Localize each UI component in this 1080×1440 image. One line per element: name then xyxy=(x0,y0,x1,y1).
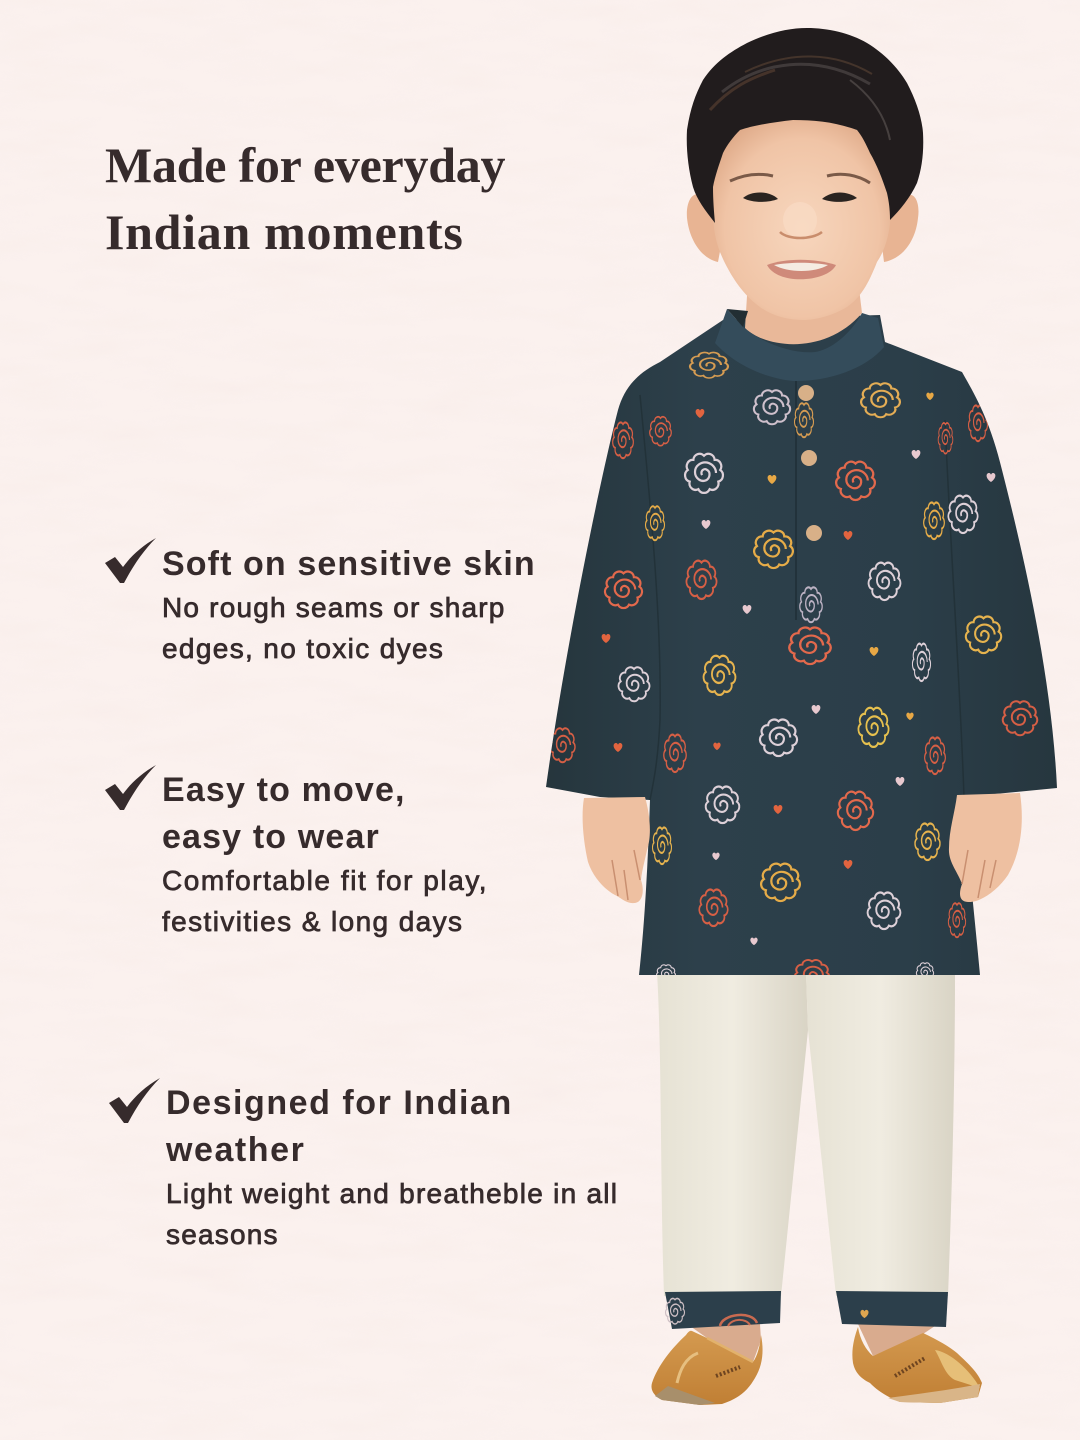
hair xyxy=(687,28,923,223)
cuffs xyxy=(665,1291,781,1329)
face xyxy=(713,115,891,320)
heading: weather xyxy=(166,1131,305,1169)
eyebrows xyxy=(730,174,773,181)
left hand xyxy=(583,797,650,903)
icon: check mark xyxy=(105,765,156,810)
description xyxy=(162,592,506,664)
hands xyxy=(583,793,1022,903)
child wearing kurta and pants xyxy=(546,28,1057,1405)
pants xyxy=(657,972,955,1362)
buttons xyxy=(798,385,814,401)
ears xyxy=(687,190,724,262)
right shoe xyxy=(852,1327,982,1403)
right hand xyxy=(949,793,1022,902)
icon: check mark xyxy=(105,538,156,583)
icon: check mark xyxy=(109,1078,160,1123)
heading: easy to wear xyxy=(162,818,380,856)
heading: Soft on sensitive skin xyxy=(162,545,536,583)
nose xyxy=(783,202,817,238)
description xyxy=(162,865,488,938)
kurta body and sleeves xyxy=(540,280,1065,991)
title: Made for everyday xyxy=(105,137,505,193)
benefit: designed for Indian weather xyxy=(109,1078,618,1250)
print: spirals xyxy=(550,352,1037,991)
placket xyxy=(795,378,797,620)
eyes xyxy=(743,192,778,202)
heading: Easy to move, xyxy=(162,771,406,809)
description: seasons xyxy=(166,1219,279,1250)
title: Indian moments xyxy=(105,204,463,260)
benefit: soft on sensitive skin xyxy=(105,538,536,664)
title xyxy=(105,137,505,260)
description: edges, no toxic dyes xyxy=(162,633,444,664)
description xyxy=(166,1178,618,1250)
description: Comfortable fit for play, xyxy=(162,865,488,896)
heading: Designed for Indian xyxy=(166,1084,513,1122)
description: festivities & long days xyxy=(162,906,463,937)
description: No rough seams or sharp xyxy=(162,592,506,623)
shoes xyxy=(651,1327,982,1405)
heading xyxy=(162,771,406,856)
head xyxy=(687,28,923,320)
smile xyxy=(767,260,836,279)
description: Light weight and breatheble in all xyxy=(166,1178,618,1209)
ankles xyxy=(690,1324,761,1362)
neck xyxy=(745,280,862,344)
left shoe xyxy=(651,1331,763,1405)
heading xyxy=(166,1084,513,1169)
benefit: easy to move xyxy=(105,765,488,938)
collar xyxy=(715,309,884,381)
